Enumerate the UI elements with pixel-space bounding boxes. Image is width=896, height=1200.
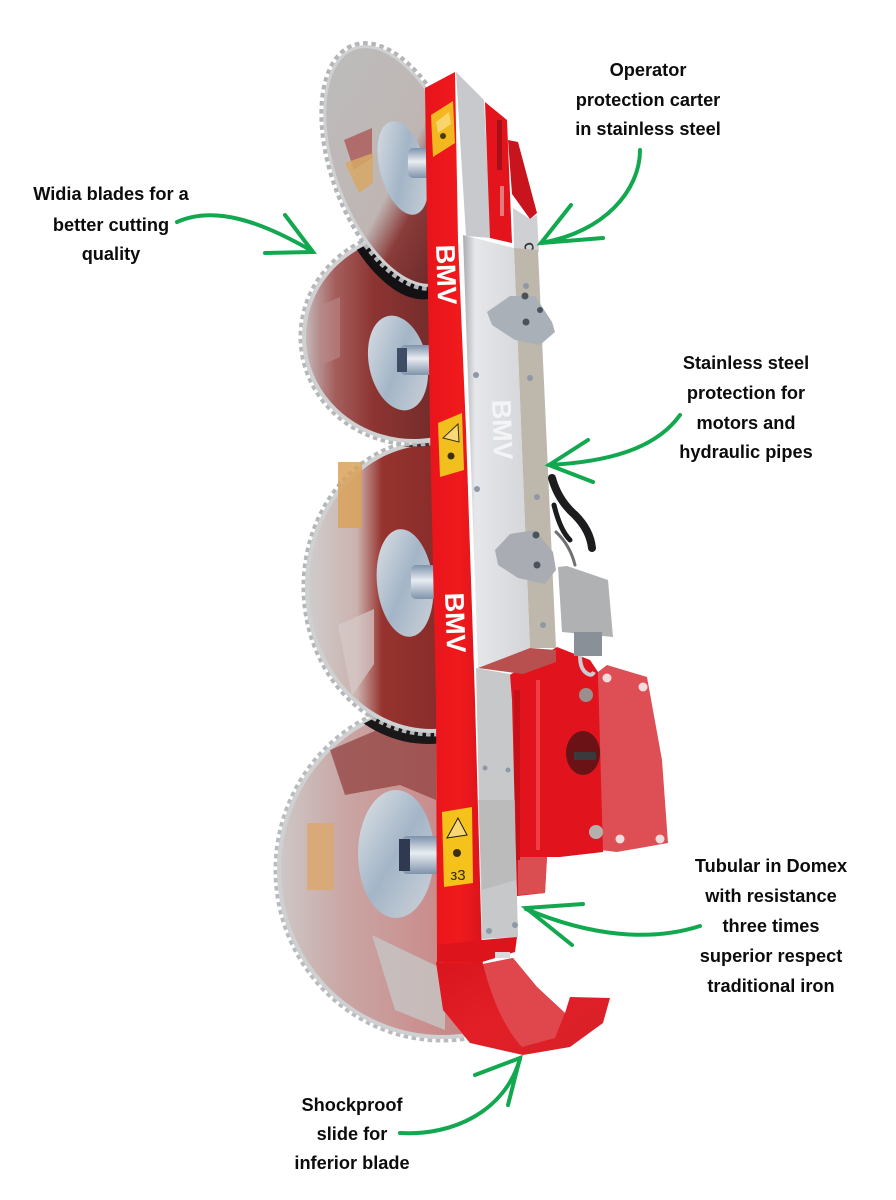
label: Shockproof slide: inferior blade [294,1153,410,1173]
hydraulic hoses [552,478,592,565]
label: Tubular in Domex: three times [722,916,820,936]
label: Stainless steel protection [679,353,813,462]
saw blade 4 (bottom) [274,714,466,1042]
hydraulic motor 2 [495,530,556,584]
red body [508,647,664,896]
red flap and CE plate [508,140,539,262]
label: Stainless steel protection: motors and [696,413,796,433]
label: Widia blades: better cutting [53,215,169,235]
label: Stainless steel protection: Stainless steel [683,353,809,373]
arrow: tubular in Domex [526,904,700,945]
label: Shockproof slide: slide for [317,1124,387,1144]
label: Operator protection carter: in stainless steel [575,119,721,139]
red tube [425,72,483,965]
arrow: stainless steel protection [549,415,680,482]
rear mounting plate [598,665,668,852]
arrow: shockproof slide [400,1058,520,1133]
arrow: Widia blades [177,215,313,253]
flanges and shafts [358,116,440,918]
label: Tubular in Domex: superior respect [700,946,842,966]
label: Operator protection carter: protection carter [576,90,720,110]
label: Stainless steel protection: protection for [687,383,805,403]
label: Shockproof slide [294,1095,410,1173]
label: Operator protection carter [575,60,721,139]
main stainless protection box [463,235,556,674]
label: Widia blades [33,184,190,264]
warning label 2 [438,413,464,477]
junction box and fittings [558,566,613,675]
lower steel plate [476,668,518,939]
label: Operator protection carter: Operator [610,60,686,80]
label: Tubular in Domex [695,856,847,996]
warning label 1 [431,101,455,157]
arrow: operator protection carter [541,150,640,243]
warning label 3: з3 [450,867,466,884]
main stainless protection box: BMV [486,399,518,460]
BMV logos on tube: BMV [430,244,462,305]
label: Widia blades: quality [82,244,141,264]
saw blade 3 [302,442,436,736]
upper steel side and red strip [456,72,512,243]
warning label 3 [442,807,473,887]
label: Shockproof slide: Shockproof [301,1095,403,1115]
label: Widia blades: Widia blades for a [33,184,190,204]
shockproof slide [436,937,610,1055]
saw blade 2 [298,240,430,446]
label: Stainless steel protection: hydraulic pipes [679,442,813,462]
BMV logos on tube: BMV [439,592,471,653]
label: Tubular in Domex: with resistance [704,886,837,906]
hydraulic motor 1 [487,292,555,345]
label: Tubular in Domex: Tubular in Domex [695,856,847,876]
saw blade 1 (top) [319,41,428,291]
red flap and CE plate: CE [521,241,539,262]
label: Tubular in Domex: traditional iron [707,976,835,996]
BMV logos on tube [430,244,471,653]
